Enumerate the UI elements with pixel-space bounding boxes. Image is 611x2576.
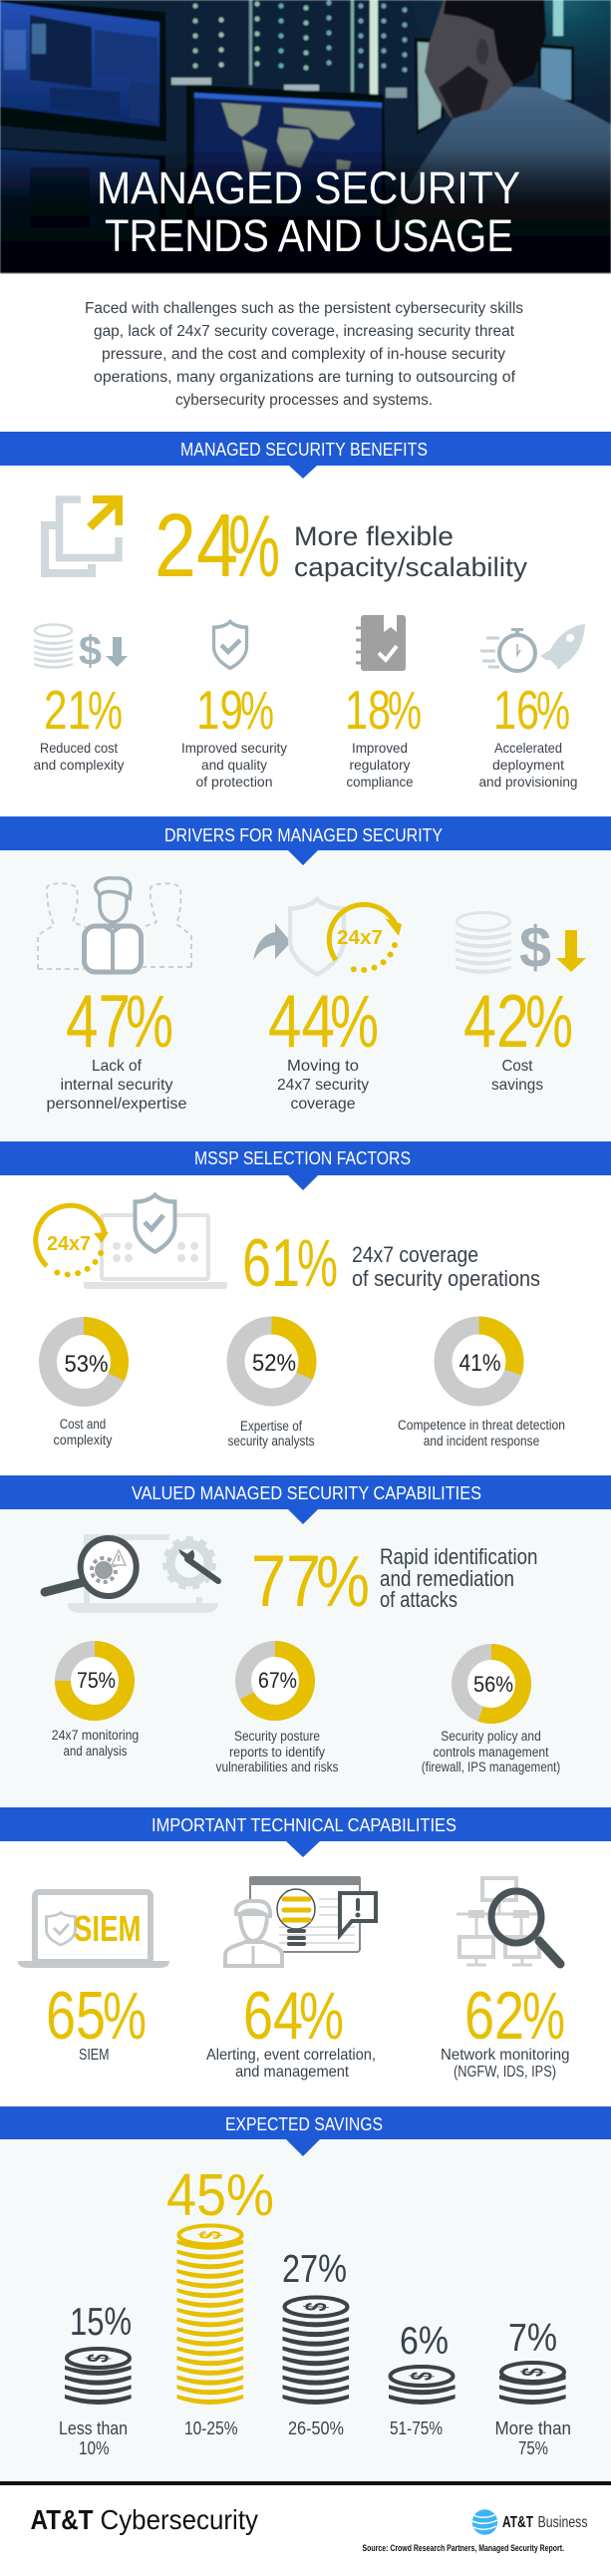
stat: 62%: % [522, 1979, 565, 2054]
hero photo: analyst at security monitors [0, 0, 611, 273]
label: moving to 24x7: coverage [291, 1096, 356, 1113]
panel: drivers for managed security [0, 816, 611, 1141]
panel: important technical capabilities [0, 1807, 611, 2081]
label: expertise of analysts: Expertise of [240, 1419, 302, 1434]
section header: benefits [0, 432, 611, 479]
stat: 18%: 18 [345, 679, 391, 741]
label: improved security: Improved security [181, 740, 287, 756]
label: competence in threat detection [398, 1418, 565, 1449]
label: 24x7 monitoring: 24x7 monitoring [52, 1728, 139, 1743]
donut: 41%: 41% [458, 1350, 500, 1377]
icon: notebook with check [356, 615, 406, 671]
label: security posture reports [215, 1729, 339, 1774]
section header: technical [0, 1807, 611, 1857]
stat: 61%: 61 [242, 1225, 300, 1301]
coin stack: less than 10% [65, 2349, 132, 2405]
label: 24x7 coverage [352, 1242, 540, 1291]
title: MANAGED SECURITY [97, 162, 520, 213]
label: rapid identification [380, 1544, 538, 1612]
label: more than 75%: 75% [518, 2438, 548, 2458]
icon: alert window, lightbulb and analyst [225, 1876, 376, 1966]
label: more than 75%: More than [494, 2418, 571, 2438]
stat: 64%: % [299, 1979, 344, 2054]
stat: 65%: 65 [46, 1978, 106, 2054]
stat: 44%: % [330, 980, 379, 1063]
label: regulatory compliance [347, 740, 414, 790]
label: cost savings [491, 1058, 543, 1094]
stat: 21%: % [88, 681, 123, 741]
stat: 18%: % [388, 681, 422, 741]
section header: MSSP [0, 1141, 611, 1190]
stat: 64%: 64 [243, 1978, 303, 2054]
label: reduced cost: and complexity [34, 757, 124, 773]
label: improved security: and quality [201, 757, 267, 773]
label: expertise of analysts: security analysts [227, 1434, 315, 1449]
stat: 77%: 77 [251, 1541, 321, 1622]
icon: scalability squares with arrow [45, 495, 123, 573]
label: security policy and controls: Security policy and [441, 1729, 541, 1744]
icon: SIEM laptop: SIEM [74, 1908, 142, 1949]
donut: 67% [243, 1649, 307, 1713]
section header: savings [0, 2106, 611, 2156]
coin stack: 26-50% [283, 2297, 349, 2405]
footer [0, 2481, 611, 2554]
label: network monitoring [441, 2047, 570, 2081]
icon: stopwatch and rocket [480, 624, 585, 671]
label: lack of personnel: internal security [60, 1077, 173, 1094]
label: rapid identification: and remediation [380, 1566, 514, 1591]
logo: AT&T Cybersecurity: Cybersecurity [100, 2504, 258, 2535]
label: lack of personnel: personnel/expertise [46, 1096, 187, 1113]
section header: drivers: DRIVERS FOR MANAGED SECURITY [164, 825, 443, 845]
label: cost savings: Cost [502, 1058, 533, 1075]
label: security posture reports: Security posture [234, 1729, 320, 1744]
panel: MSSP selection factors [0, 1141, 611, 1449]
stat: 44%: 44 [268, 979, 335, 1063]
stat: 27%: 27% [282, 2248, 347, 2291]
icon: SIEM laptop [18, 1892, 169, 1968]
section header: capabilities [0, 1475, 611, 1524]
label: lack of personnel [46, 1058, 187, 1113]
label: cost and complexity [54, 1417, 113, 1448]
stat: 42%: 42 [463, 979, 529, 1063]
label: accelerated deployment [478, 740, 578, 790]
section header: MSSP: MSSP SELECTION FACTORS [194, 1148, 411, 1168]
donut: 75%: 75% [77, 1668, 116, 1693]
label: 24x7 monitoring: and analysis [64, 1744, 128, 1759]
stat: 61%: % [297, 1226, 338, 1301]
label: regulatory compliance: Improved [352, 740, 408, 756]
panel: managed security benefits [0, 432, 611, 790]
label: lack of personnel: Lack of [92, 1058, 143, 1075]
label: SIEM: SIEM [79, 2047, 110, 2064]
label: more than 75% [494, 2418, 571, 2458]
stat: 62%: 62 [464, 1978, 524, 2054]
icon: magnifier, gear and wrench over laptop [45, 1537, 218, 1613]
label: accelerated deployment: and provisioning [478, 774, 578, 790]
label: cost and complexity: complexity [54, 1433, 113, 1448]
icon: coins and dollar down [34, 624, 128, 674]
stat: 7%: 7% [508, 2317, 557, 2360]
label: alerting, event correlation [206, 2047, 376, 2081]
section header: benefits: MANAGED SECURITY BENEFITS [180, 440, 428, 460]
stat: 77% [251, 1541, 370, 1622]
intro paragraph: cybersecurity processes and systems. [175, 392, 433, 409]
stat: 24%: % [228, 496, 280, 595]
icon: laptop, shield and 24x7 clock [36, 1194, 227, 1289]
stat: 21%: 21 [44, 679, 91, 741]
stat: 16%: % [536, 681, 570, 741]
logo: AT&T Cybersecurity [30, 2504, 258, 2535]
donut: 53%: 53% [64, 1351, 108, 1378]
stat: 47%: % [126, 980, 173, 1063]
stat: 65%: % [103, 1979, 147, 2054]
label: more flexible capacity: More flexible [294, 521, 454, 551]
icon: shield with 24x7 clock: 24x7 [337, 927, 383, 949]
label: improved security: of protection [195, 774, 273, 790]
stat: 42%: % [525, 980, 573, 1063]
coin stack: 10-25% [177, 2225, 243, 2405]
label: rapid identification: of attacks [380, 1587, 458, 1612]
label: network monitoring: Network monitoring [441, 2047, 570, 2064]
icon: shield with check [213, 622, 247, 668]
label: more flexible capacity: capacity/scalability [294, 552, 528, 582]
donut: 56% [459, 1652, 523, 1716]
label: more flexible capacity [294, 521, 528, 582]
label: rapid identification: Rapid identification [380, 1544, 538, 1569]
label: moving to 24x7: Moving to [287, 1058, 359, 1075]
label: security policy and controls: controls management [433, 1745, 549, 1760]
label: less than 10% [59, 2418, 128, 2458]
donut: 41% [443, 1326, 514, 1398]
label: expertise of analysts [227, 1419, 315, 1449]
label: competence in threat detection: and incident response [424, 1434, 539, 1449]
label: moving to 24x7: 24x7 security [277, 1077, 369, 1094]
label: network monitoring: (NGFW, IDS, IPS) [454, 2064, 556, 2081]
coin stack: 51-75%: $ [405, 2371, 441, 2381]
label: security posture reports: vulnerabilities and risks [215, 1760, 339, 1774]
logo: AT&T Cybersecurity: AT&T [30, 2504, 94, 2535]
label: accelerated deployment: Accelerated [494, 740, 562, 756]
section header: capabilities: VALUED MANAGED SECURITY CAPABILITIES [132, 1483, 481, 1503]
icon: shield with 24x7 clock [253, 899, 402, 974]
label: security policy and controls: (firewall, IPS management) [422, 1760, 560, 1774]
section header: savings: EXPECTED SAVINGS [225, 2114, 383, 2134]
panel: expected savings [0, 2106, 611, 2481]
label: regulatory compliance: regulatory [349, 757, 411, 773]
intro paragraph: operations, many organizations are turning to outsourcing of [94, 369, 516, 386]
intro paragraph [85, 300, 523, 409]
logo: AT&T Business globe: Business [538, 2514, 588, 2531]
stat: 19%: % [240, 681, 274, 741]
coin stack: 51-75% [389, 2367, 456, 2405]
stat: 19%: 19 [196, 679, 243, 741]
icon: coins and dollar down: $ [79, 627, 102, 674]
coin stack: more than 75%: $ [516, 2367, 551, 2377]
label: cost savings: savings [491, 1077, 543, 1094]
coin stack: more than 75% [499, 2363, 566, 2405]
label: 24x7 coverage: 24x7 coverage [352, 1242, 478, 1267]
panel: valued managed security capabilities [0, 1475, 611, 1807]
intro paragraph: pressure, and the cost and complexity of in-house security [102, 346, 505, 363]
section header: technical: IMPORTANT TECHNICAL CAPABILITIES [152, 1815, 457, 1835]
label: alerting, event correlation: Alerting, event correlation, [206, 2047, 376, 2064]
intro paragraph: gap, lack of 24x7 security coverage, increasing security threat [94, 323, 515, 340]
icon: laptop, shield and 24x7 clock: 24x7 [47, 1233, 91, 1255]
stat: 24%: 24 [154, 496, 238, 596]
stat: 6%: 6% [400, 2320, 449, 2363]
label: competence in threat detection: Competence in threat detection [398, 1418, 565, 1433]
icon: network monitors and magnifier [457, 1878, 560, 1965]
label: security policy and controls [422, 1729, 560, 1774]
label: 24x7 coverage: of security operations [352, 1266, 540, 1291]
stat: 15%: 15% [70, 2301, 132, 2344]
label: cost and complexity: Cost and [60, 1417, 106, 1432]
label: 26-50%: 26-50% [288, 2418, 344, 2438]
intro paragraph: Faced with challenges such as the persistent cybersecurity skills [85, 300, 523, 317]
label: improved security [181, 740, 287, 790]
label: regulatory compliance: compliance [347, 774, 414, 790]
title [97, 162, 520, 261]
label: accelerated deployment: deployment [492, 757, 564, 773]
hero banner [0, 0, 611, 273]
stat: 77%: % [316, 1542, 370, 1622]
label: less than 10%: Less than [59, 2418, 128, 2438]
icon: person with dashed colleagues [38, 878, 191, 972]
icon: coins, dollar and gold arrow: $ [519, 915, 551, 980]
stat: 45%: 45% [166, 2162, 274, 2228]
label: 10-25%: 10-25% [184, 2418, 237, 2438]
coin stack: less than 10%: $ [82, 2353, 117, 2363]
coin stack: 10-25%: $ [193, 2230, 229, 2240]
donut: 52%: 52% [252, 1350, 296, 1377]
label: security posture reports: reports to identify [229, 1745, 325, 1760]
coin stack: 26-50%: $ [299, 2302, 335, 2312]
donut: 56%: 56% [473, 1672, 513, 1697]
stat: 16%: 16 [493, 679, 539, 741]
icon: coins, dollar and gold arrow [456, 913, 586, 980]
donut: 75% [63, 1649, 127, 1713]
label: reduced cost [34, 740, 124, 773]
label: alerting, event correlation: and management [235, 2064, 350, 2081]
logo: AT&T Business globe [472, 2509, 588, 2535]
donut: 52% [235, 1326, 307, 1398]
label: reduced cost: Reduced cost [40, 740, 118, 756]
stat: 47%: 47 [66, 979, 131, 1063]
label: 24x7 monitoring [52, 1728, 139, 1759]
label: less than 10%: 10% [79, 2438, 110, 2458]
label: 51-75%: 51-75% [390, 2418, 443, 2438]
title: TRENDS AND USAGE [105, 210, 513, 261]
label: moving to 24x7 [277, 1058, 369, 1113]
donut: 53% [48, 1326, 120, 1398]
logo: AT&T Business globe: AT&T [502, 2514, 533, 2531]
section header: drivers [0, 816, 611, 865]
donut: 67%: 67% [258, 1668, 297, 1693]
